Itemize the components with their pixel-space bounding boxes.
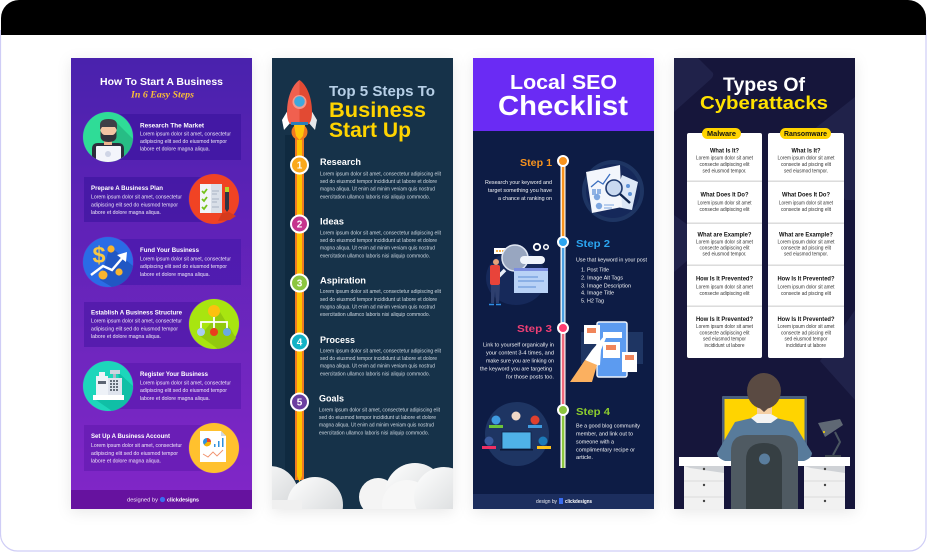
step 3: aspiration: magna aliqua. Ut enim ad minim veniam quis nostrud	[320, 304, 435, 310]
column: malware: consecte adipiscing elit	[700, 162, 750, 168]
pill	[702, 128, 741, 139]
column: malware: consecte adipiscing elit	[700, 207, 750, 213]
title: How To Start A Business	[100, 77, 223, 88]
step: fund your business	[82, 236, 241, 288]
column: ransomware: consecte ad piscing elit	[781, 291, 832, 297]
column: ransomware: consecte ad piscing elit	[781, 162, 832, 168]
panel: local seo checklist	[473, 58, 654, 509]
step 5: goals: Goals	[319, 394, 344, 404]
step 2: 2. Image Alt Tags	[581, 276, 623, 282]
illustration: person at desk with monitor	[679, 373, 850, 509]
step 2	[576, 238, 648, 304]
column: malware: Lorem ipsum dolor sit amet	[698, 200, 752, 206]
step 4: article.	[576, 455, 593, 461]
column: ransomware: Lorem ipsum dolor sit amet	[778, 284, 835, 290]
step: research the market: Research The Market	[140, 122, 205, 130]
step 1: Research your keyword and	[485, 180, 552, 186]
step 3: aspiration	[291, 274, 442, 318]
step 1: research: 1	[297, 160, 303, 172]
step: fund your business: adipiscing elit sed do eiusmod tempor	[140, 264, 227, 270]
step 2: ideas: Lorem ipsum dolor sit amet, consectetur adipiscing elit	[320, 230, 442, 236]
step 4: Step 4	[576, 406, 610, 418]
step 5: goals: Lorem ipsum dolor sit amet, consectetur adipiscing elit	[319, 408, 441, 414]
footer: design by: design by	[536, 499, 557, 505]
pill	[780, 128, 831, 139]
step 4: process: Lorem ipsum dolor sit amet, consectetur adipiscing elit	[320, 348, 442, 354]
column: ransomware: What Does It Do?	[782, 192, 830, 198]
step 2: 3. Image Description	[581, 284, 631, 290]
column: ransomware: sed eiusmod tempor.	[784, 252, 828, 258]
step 5: goals: exercitation ullamco laboris nisi aliquip commodo.	[319, 430, 429, 436]
column: ransomware: Lorem ipsum dolor sit amet	[778, 240, 835, 246]
column: ransomware: consecte ad piscing elit	[781, 207, 832, 213]
column: malware: sed eiusmod tempor.	[702, 252, 746, 258]
step 2: Use that keyword in your post	[576, 258, 648, 264]
column: malware: Lorem ipsum dolor sit amet	[696, 284, 754, 290]
step: establish a business structure: Lorem ipsum dolor sit amet, consectetur	[91, 318, 182, 324]
step: register your business	[82, 360, 241, 412]
step: fund your business: Fund Your Business	[140, 247, 199, 254]
step 3: make sure you are linking on	[486, 358, 554, 364]
pill: Ransomware	[784, 131, 827, 138]
column: malware: sed eiusmod tempor	[703, 336, 746, 342]
header	[473, 58, 654, 131]
step: research the market: labore et dolore magna aliqua.	[140, 146, 210, 152]
column: ransomware: What are Example?	[779, 232, 833, 238]
step: fund your business: Lorem ipsum dolor sit amet, consectetur	[140, 256, 231, 262]
step 2: ideas: sed do eiusmod tempor incididunt ut labore et dolore	[320, 238, 437, 244]
column: malware: What Does It Do?	[700, 192, 749, 198]
column: ransomware: sed eiusmod tempor.	[784, 168, 828, 174]
column: ransomware: Lorem ipsum dolor sit amet	[779, 200, 834, 206]
step 4: process	[291, 334, 442, 378]
header: Checklist	[498, 90, 628, 121]
title: Cyberattacks	[700, 93, 828, 113]
column: malware: incididunt ut labore	[704, 343, 745, 349]
footer: design by	[473, 494, 654, 509]
footer: design by: clickdesigns	[565, 499, 592, 505]
column: ransomware: Lorem ipsum dolor sit amet	[778, 156, 835, 162]
step 5: goals: magna aliqua. Ut enim ad minim veniam quis nostrud	[319, 422, 434, 428]
step: establish a business structure	[84, 298, 240, 350]
column: ransomware: consecte ad piscing elit	[781, 330, 832, 336]
panel: types of cyberattacks	[674, 58, 855, 509]
step 4	[576, 406, 640, 461]
icon: checklist and pen	[188, 174, 240, 224]
step: prepare a business plan	[84, 174, 240, 224]
icon: report with charts	[188, 422, 240, 474]
column: malware: consecte adipiscing elit	[700, 330, 750, 336]
column: malware: consecte adipiscing elit	[700, 291, 750, 297]
step 2: ideas	[291, 216, 442, 260]
footer: designed by: designed by	[127, 498, 159, 504]
title	[700, 74, 828, 113]
step: research the market: Lorem ipsum dolor sit amet, consectetur	[140, 132, 231, 138]
step: prepare a business plan: adipiscing elit sed do eiusmod tempor	[91, 202, 178, 208]
step: prepare a business plan: labore et dolore magna aliqua.	[91, 210, 161, 216]
title: Types Of	[723, 74, 805, 96]
timeline	[558, 156, 568, 468]
column: ransomware: What Is It?	[792, 148, 821, 154]
step 2: ideas: Ideas	[320, 216, 344, 226]
title: Start Up	[329, 119, 411, 142]
step 3: for those posts too.	[506, 374, 554, 380]
column: malware: sed eiusmod tempor.	[702, 168, 746, 174]
icon: social network laptop	[482, 402, 551, 466]
column: malware: How Is It Prevented?	[696, 316, 753, 323]
panel: how to start a business	[71, 58, 252, 509]
step 3: Step 3	[517, 323, 552, 335]
step 5: goals	[291, 394, 441, 436]
clouds	[272, 463, 453, 509]
icon: documents and magnifier	[582, 160, 644, 222]
column: ransomware: incididunt ut labore	[786, 343, 826, 349]
step 3: Link to yourself organically in	[483, 342, 554, 348]
step 1: research: magna aliqua. Ut enim ad minim veniam quis nostrud	[320, 186, 435, 192]
timeline bar	[295, 130, 304, 482]
step 1: a chance at ranking on	[498, 196, 552, 202]
subtitle: In 6 Easy Steps	[130, 90, 194, 100]
step 1	[485, 157, 552, 202]
step 2: 5. H2 Tag	[581, 298, 604, 304]
footer: designed by	[71, 490, 252, 509]
icon: org chart	[188, 298, 240, 350]
step: register your business: labore et dolore magna aliqua.	[140, 396, 210, 402]
step 3: aspiration: 3	[297, 278, 303, 290]
column: malware: Lorem ipsum dolor sit amet	[696, 156, 754, 162]
column: malware: consecte adipiscing elit	[700, 246, 750, 252]
step 2: Step 2	[576, 238, 610, 250]
column: ransomware: Lorem ipsum dolor sit amet	[778, 324, 835, 330]
step: fund your business: labore et dolore magna aliqua.	[140, 272, 210, 278]
icon: security camera	[818, 419, 843, 457]
step: establish a business structure: Establish A Business Structure	[91, 310, 182, 316]
step 1: target something you have	[488, 188, 552, 194]
column: malware: What are Example?	[698, 232, 752, 238]
step 1: research: Lorem ipsum dolor sit amet, consectetur adipiscing elit	[320, 172, 442, 178]
step 3: your content 3-4 times, and	[486, 350, 554, 356]
step: register your business: Lorem ipsum dolor sit amet, consectetur	[140, 380, 231, 386]
column: malware: Lorem ipsum dolor sit amet	[696, 240, 754, 246]
pill: Malware	[707, 131, 736, 138]
footer: designed by: clickdesigns	[167, 498, 199, 504]
step 2: 4. Image Title	[581, 290, 614, 296]
step 4: Be a good blog community	[576, 424, 640, 430]
column: ransomware	[768, 128, 844, 358]
column: malware	[687, 128, 762, 358]
step 1: research	[291, 156, 442, 200]
panel: top 5 steps to business start up	[270, 58, 456, 514]
step 3	[480, 323, 554, 380]
step 2: 1. Post Title	[581, 268, 609, 274]
step: register your business: Register Your Business	[140, 371, 208, 378]
step 2: ideas: magna aliqua. Ut enim ad minim veniam quis nostrud	[320, 246, 435, 252]
step 3: the keyword you are targeting	[480, 366, 552, 372]
step 4: process: 4	[297, 338, 303, 348]
step 3: aspiration: Lorem ipsum dolor sit amet, consectetur adipiscing elit	[320, 289, 442, 295]
step 4: process: Process	[320, 335, 355, 345]
step: prepare a business plan: Lorem ipsum dolor sit amet, consectetur	[91, 194, 182, 200]
step 4: process: sed do eiusmod tempor incididunt ut labore et dolore	[320, 356, 437, 362]
step 5: goals: sed do eiusmod tempor incididunt ut labore et dolore	[319, 415, 436, 421]
step 1: research: Research	[320, 157, 361, 167]
icon: hand on phone with cards	[570, 322, 643, 382]
icon: rocket	[282, 80, 317, 140]
step: establish a business structure: labore et dolore magna aliqua.	[91, 334, 161, 340]
column: malware: How Is It Prevented?	[696, 276, 753, 282]
step 5: goals: 5	[297, 398, 303, 408]
step 3: aspiration: exercitation ullamco laboris nisi aliquip commodo.	[320, 312, 430, 318]
step: prepare a business plan: Prepare A Business Plan	[91, 185, 163, 192]
step: register your business: adipiscing elit sed do eiusmod tempor	[140, 388, 227, 394]
step 1: research: exercitation ullamco laboris nisi aliquip commodo.	[320, 194, 430, 200]
header: Local SEO	[510, 72, 617, 94]
step 1: Step 1	[520, 157, 552, 169]
step 2: ideas: exercitation ullamco laboris nisi aliquip commodo.	[320, 254, 430, 260]
icon: person with magnifier and search page	[486, 244, 548, 305]
step: set up a business account: Set Up A Business Account	[91, 433, 171, 440]
icon: dollar and growth arrow: $	[92, 242, 106, 268]
title	[329, 83, 435, 142]
column: malware: Lorem ipsum dolor sit amet	[696, 324, 754, 330]
column: ransomware: How Is It Prevented?	[778, 316, 835, 323]
step: set up a business account	[84, 422, 240, 474]
step 4: complimentary recipe or	[576, 448, 635, 454]
step 4: process: exercitation ullamco laboris nisi aliquip commodo.	[320, 372, 430, 378]
step: establish a business structure: adipiscing elit sed do eiusmod tempor	[91, 326, 178, 332]
step 1: research: sed do eiusmod tempor incididunt ut labore et dolore	[320, 179, 437, 185]
step 4: process: magna aliqua. Ut enim ad minim veniam quis nostrud	[320, 364, 435, 370]
title: Business	[329, 99, 426, 122]
step: set up a business account: adipiscing elit sed do eiusmod tempor	[91, 451, 178, 457]
icon: dollar and growth arrow	[82, 236, 134, 288]
step: research the market	[82, 112, 241, 165]
step 2: ideas: 2	[297, 220, 303, 230]
column: malware: What Is It?	[710, 148, 739, 154]
column: ransomware: consecte ad piscing elit	[781, 246, 832, 252]
step: research the market: adipiscing elit sed do eiusmod tempor	[140, 139, 227, 145]
icon: cash register	[82, 360, 134, 412]
step: set up a business account: labore et dolore magna aliqua.	[91, 458, 161, 464]
column: ransomware: How Is It Prevented?	[778, 276, 835, 282]
step: set up a business account: Lorem ipsum dolor sit amet, consectetur	[91, 443, 182, 449]
icon: man at laptop	[82, 112, 134, 162]
step 4: someone with a	[576, 440, 614, 446]
step 3: aspiration: sed do eiusmod tempor incididunt ut labore et dolore	[320, 297, 437, 303]
step 3: aspiration: Aspiration	[320, 276, 366, 286]
title: Top 5 Steps To	[329, 83, 435, 100]
column: ransomware: sed eiusmod tempor	[784, 336, 828, 342]
step 4: member, and link out to	[576, 432, 633, 438]
